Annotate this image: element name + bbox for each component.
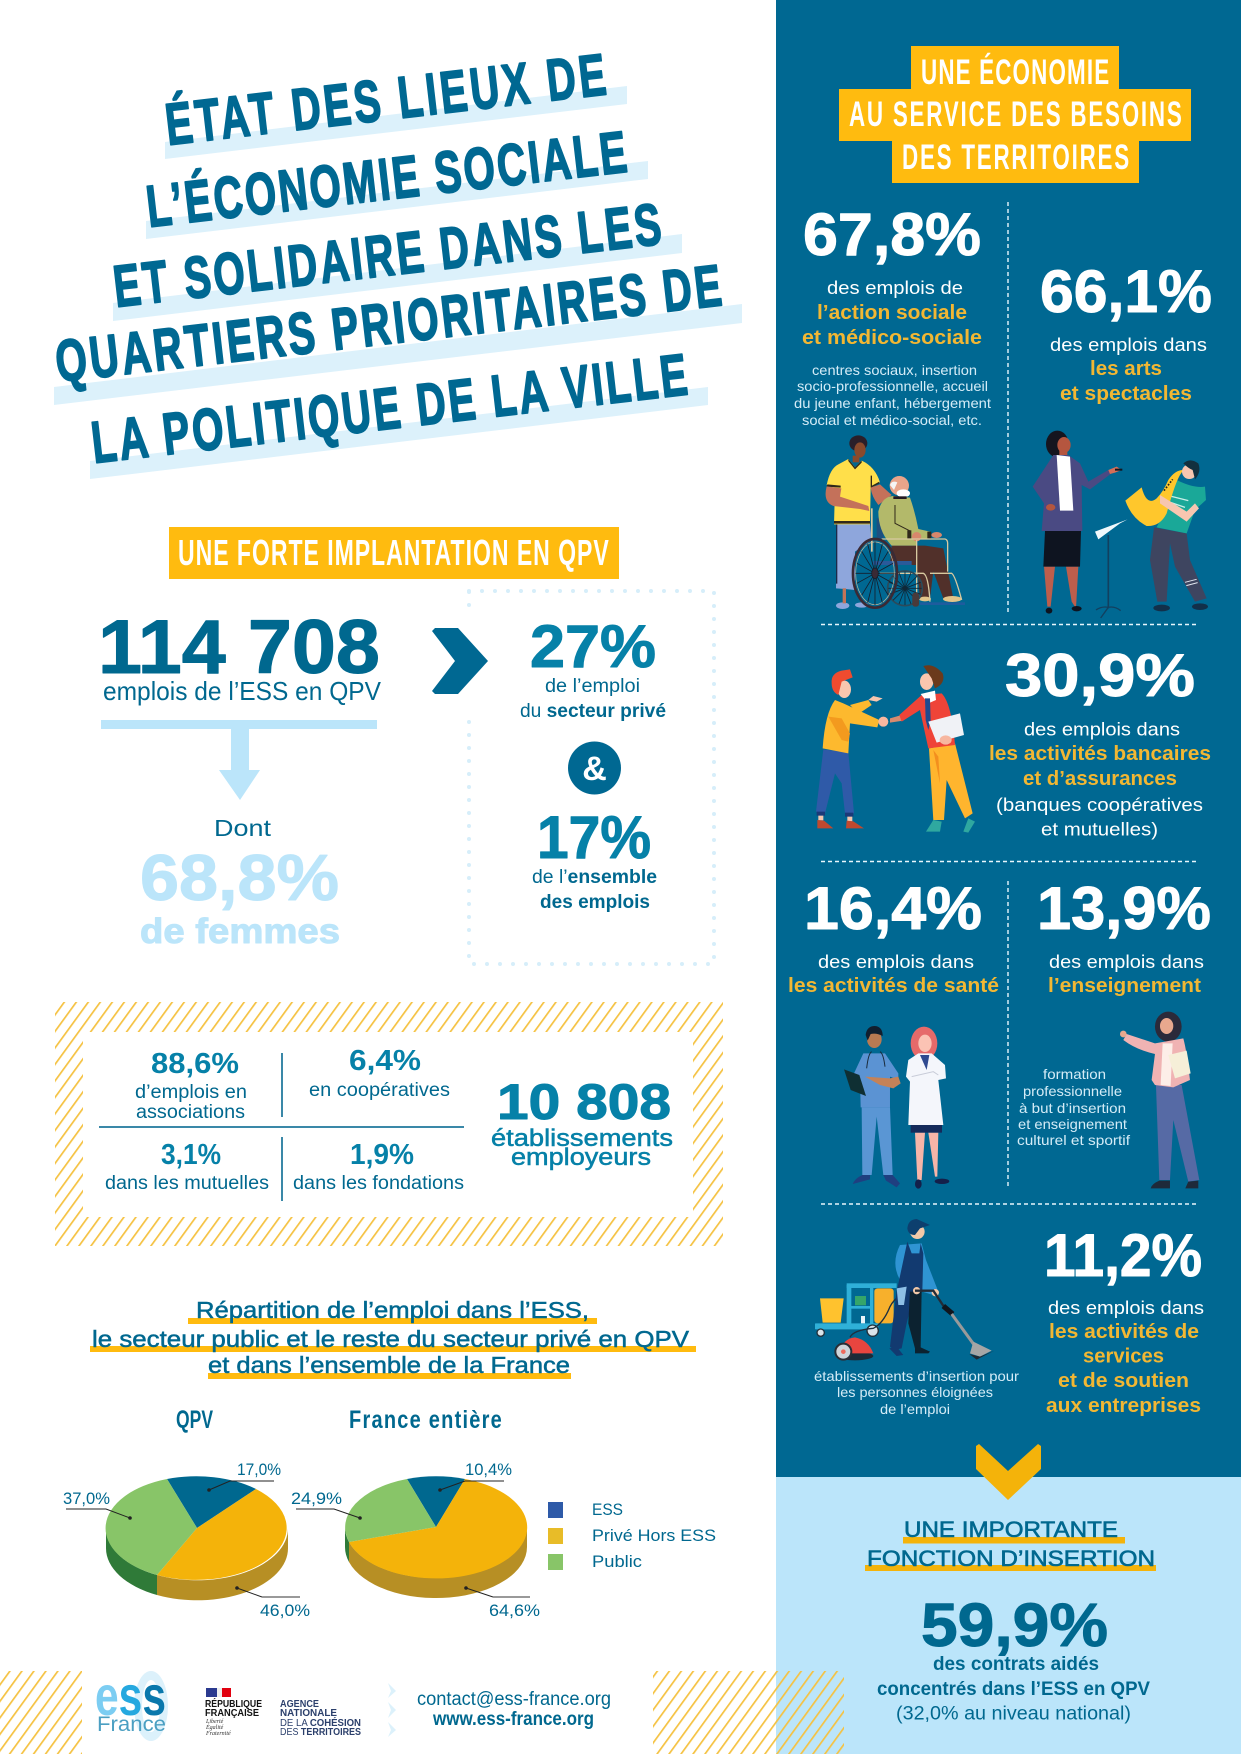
logo: République française: Égalité (205, 1723, 224, 1731)
stat: 30,9% activités bancaires: des emplois dans (1024, 718, 1180, 740)
stat: 67,8% action sociale: centres sociaux, insertion (812, 362, 977, 378)
stat: 68,8% de femmes: Dont (214, 815, 272, 841)
logo: Agence nationale de la cohésion des territoires: NATIONALE (280, 1708, 337, 1719)
stat: 6,4% coopératives: 6,4% (349, 1045, 421, 1077)
stat: 10 808 établissements: employeurs (511, 1144, 651, 1171)
chart: France entière pie: 24,9% (291, 1489, 342, 1508)
stat: 10 808 établissements: 10 808 (497, 1074, 671, 1130)
chart: France entière pie: 10,4% (465, 1460, 512, 1479)
stat: 17% de l'ensemble des emplois: des emplois (540, 892, 650, 913)
arrow: yellow chevron down (976, 1444, 1041, 1500)
stat: 68,8% de femmes: 68,8% (140, 841, 339, 914)
logo: Agence nationale de la cohésion des territoires: DES TERRITOIRES (280, 1727, 361, 1738)
text: formation professionnelle: à but d’insertion (1019, 1100, 1126, 1116)
stat: 16,4% activités de santé: les activités de santé (788, 974, 999, 997)
stat: 67,8% action sociale: social et médico-social, etc. (802, 412, 982, 428)
stat: 3,1% mutuelles: dans les mutuelles (105, 1173, 269, 1194)
heading: une économie au service des besoins (839, 46, 1191, 183)
legend (548, 1500, 716, 1571)
dashed vertical separators (821, 202, 1196, 1204)
stat: 30,9% activités bancaires: et d’assurances (1023, 767, 1177, 790)
chart: France entière pie: 64,6% (489, 1601, 540, 1620)
stat: 1,9% fondations: dans les fondations (293, 1173, 464, 1194)
contact block (417, 1689, 611, 1730)
icon: ampersand badge: & (582, 750, 607, 788)
heading: répartition de l'emploi (90, 1297, 696, 1379)
stat: 88,6% associations (135, 1048, 247, 1123)
stat: 67,8% action sociale: 67,8% (803, 201, 981, 268)
stat: 88,6% associations: 88,6% (151, 1048, 239, 1080)
stat: 88,6% associations: associations (136, 1102, 245, 1123)
chart: QPV pie: 37,0% (63, 1489, 110, 1508)
logo: République française: RÉPUBLIQUE (205, 1697, 262, 1710)
legend: Public (592, 1552, 643, 1571)
stat: 88,6% associations: d’emplois en (135, 1082, 247, 1103)
illustration: cleaner with cart and vacuum (815, 1219, 994, 1360)
illustration: doctors and teacher (844, 1012, 1199, 1189)
contact block: www.ess-france.org (432, 1709, 594, 1730)
logo: Agence nationale de la cohésion des territoires: AGENCE (280, 1699, 319, 1710)
stat: 17% de l'ensemble des emplois (532, 804, 657, 913)
stat: 11,2% services et soutien: les activités de (1049, 1320, 1199, 1343)
text: formation professionnelle: professionnelle (1023, 1083, 1122, 1099)
stat: 11,2% services et soutien (1044, 1222, 1204, 1417)
stat: 11,2% services et soutien: et de soutien (1058, 1369, 1189, 1392)
stat: 67,8% action sociale: et médico-sociale (802, 326, 982, 349)
arrow: dark chevron (432, 628, 488, 694)
heading: une importante fonction d'insertion: UNE IMPORTANTE (904, 1517, 1118, 1542)
chart: QPV pie: 17,0% (237, 1460, 281, 1479)
logo: République française: Fraternité (205, 1731, 231, 1737)
stat: 16,4% activités de santé: 16,4% (804, 875, 982, 942)
logo: Agence nationale de la cohésion des territoires (280, 1699, 361, 1738)
stat: 67,8% action sociale: l’action sociale (817, 301, 967, 324)
stat: 10 808 établissements (491, 1074, 673, 1171)
stat: 27% du secteur privé: 27% (530, 613, 656, 680)
stat: 66,1% arts et spectacles: et spectacles (1060, 382, 1192, 405)
heading: une économie au service des besoins: UNE ÉCONOMIE (921, 52, 1109, 92)
stat: 17% de l'ensemble des emplois: de l’ensemble (532, 867, 657, 888)
stat: 13,9% enseignement: 13,9% (1037, 875, 1211, 942)
stat: 6,4% coopératives (309, 1045, 450, 1101)
text: établissements d'insertion: les personnes éloignées (837, 1384, 993, 1400)
stat: 67,8% action sociale (794, 201, 991, 428)
heading: répartition de l'emploi: et dans l’ensemble de la France (208, 1352, 570, 1378)
stat: 1,9% fondations: 1,9% (350, 1139, 414, 1171)
text: formation professionnelle (1017, 1066, 1130, 1148)
stat: 59,9% contrats aidés: des contrats aidés (933, 1654, 1099, 1675)
logo: République française (205, 1688, 262, 1737)
title: L’ÉCONOMIE SOCIALE (143, 118, 630, 240)
title: QUARTIERS PRIORITAIRES DE (52, 252, 725, 395)
stat: 10 808 établissements: établissements (491, 1125, 673, 1152)
stat: 6,4% coopératives: en coopératives (309, 1080, 450, 1101)
stat: 1,9% fondations (293, 1139, 464, 1194)
text: formation professionnelle: culturel et sportif (1017, 1132, 1130, 1148)
stat: 59,9% contrats aidés: (32,0% au niveau national) (896, 1704, 1131, 1724)
stat: 114 708 emplois: emplois de l’ESS en QPV (103, 676, 382, 706)
stat: 30,9% activités bancaires: 30,9% (1005, 642, 1195, 709)
stat: 17% de l'ensemble des emplois: 17% (537, 804, 651, 871)
stat: 68,8% de femmes (140, 815, 340, 951)
icon: ampersand badge (568, 742, 621, 794)
text: établissements d'insertion: de l’emploi (880, 1401, 950, 1417)
chart title: QPV: QPV (176, 1405, 214, 1434)
panel: right dark column (776, 0, 1241, 1477)
stat: 30,9% activités bancaires: les activités bancaires (989, 742, 1211, 765)
stat: 27% du secteur privé (520, 613, 666, 722)
heading: répartition de l'emploi: le secteur public et le reste du secteur privé en QPV (92, 1326, 690, 1352)
stat: 67,8% action sociale: des emplois de (827, 277, 963, 298)
stat: 3,1% mutuelles (105, 1139, 269, 1194)
chart: QPV pie (63, 1460, 310, 1620)
chart: France entière pie (291, 1460, 540, 1620)
stat: 13,9% enseignement: des emplois dans (1049, 951, 1204, 972)
stat: 67,8% action sociale: du jeune enfant, hébergement (794, 395, 991, 411)
stat: 66,1% arts et spectacles: les arts (1090, 357, 1162, 380)
title: ET SOLIDAIRE DANS LES (110, 190, 665, 320)
text: formation professionnelle: et enseignement (1018, 1116, 1127, 1132)
title (52, 41, 742, 479)
stat: 67,8% action sociale: socio-professionnelle, accueil (797, 378, 988, 394)
icon: light chevrons (388, 1683, 396, 1737)
chart: QPV pie: 46,0% (260, 1601, 310, 1620)
stat: 3,1% mutuelles: 3,1% (161, 1139, 221, 1171)
chart title: France entière: France entière (349, 1406, 502, 1434)
panel: dotted box (462, 591, 714, 964)
stat: 27% du secteur privé: du secteur privé (520, 701, 666, 722)
stat: 11,2% services et soutien: des emplois dans (1048, 1297, 1204, 1318)
stat: 68,8% de femmes: de femmes (140, 912, 340, 951)
text: formation professionnelle: formation (1043, 1066, 1106, 1082)
heading: une économie au service des besoins: AU SERVICE DES BESOINS (849, 95, 1182, 134)
stat: 59,9% contrats aidés (877, 1591, 1150, 1724)
illustration: conductor and saxophonist (1033, 431, 1208, 618)
logo: ESS France: ess (95, 1664, 166, 1727)
heading: une importante fonction d'insertion: FONCTION D’INSERTION (867, 1546, 1155, 1571)
stat: 13,9% enseignement: l’enseignement (1048, 974, 1201, 997)
arrow: bar and down arrow (101, 720, 377, 800)
illustration: caregiver and wheelchair (826, 435, 965, 609)
logo: République française: FRANÇAISE (205, 1708, 259, 1719)
illustration: handshake (816, 665, 975, 833)
contact block: contact@ess-france.org (417, 1689, 611, 1710)
stat: 59,9% contrats aidés: concentrés dans l’ESS en QPV (877, 1679, 1150, 1700)
logo: Agence nationale de la cohésion des territoires: DE LA COHÉSION (280, 1716, 361, 1729)
panel: insertion light-blue block (776, 1477, 1241, 1754)
stat: 11,2% services et soutien: aux entreprises (1046, 1394, 1201, 1417)
stat: 11,2% services et soutien: services (1083, 1344, 1164, 1368)
stat: 114 708 emplois: 114 708 (98, 605, 380, 690)
heading: une importante fonction d'insertion (865, 1517, 1156, 1571)
stat: 11,2% services et soutien: 11,2% (1044, 1222, 1202, 1289)
stat: 30,9% activités bancaires: et mutuelles) (1041, 818, 1158, 840)
stat: 16,4% activités de santé: des emplois dans (818, 951, 974, 972)
legend: Privé Hors ESS (592, 1526, 716, 1545)
footer hatch right (653, 1671, 844, 1754)
stat: 30,9% activités bancaires (989, 642, 1211, 840)
stat: 30,9% activités bancaires: (banques coopératives (996, 794, 1203, 815)
legend: ESS (592, 1500, 623, 1519)
logo: République française: Liberté (205, 1719, 224, 1725)
title: ÉTAT DES LIEUX DE (162, 41, 609, 158)
panel: hatched stats box (55, 1002, 723, 1246)
footer hatch left (0, 1671, 82, 1754)
stat: 66,1% arts et spectacles: des emplois dans (1050, 334, 1207, 355)
stat: 27% du secteur privé: de l’emploi (545, 676, 640, 697)
stat: 66,1% arts et spectacles (1040, 258, 1212, 405)
logo: ESS France: France (97, 1713, 166, 1736)
heading: une économie au service des besoins: DES TERRITOIRES (902, 138, 1129, 177)
stat: 59,9% contrats aidés: 59,9% (921, 1591, 1108, 1659)
heading: une forte implantation: UNE FORTE IMPLANTATION EN QPV (178, 534, 609, 573)
text: établissements d'insertion (814, 1368, 1019, 1417)
title: LA POLITIQUE DE LA VILLE (88, 341, 691, 476)
stat: 16,4% activités de santé (788, 875, 999, 997)
stat: 13,9% enseignement (1037, 875, 1211, 997)
heading: répartition de l'emploi: Répartition de l’emploi dans l’ESS, (196, 1297, 589, 1323)
stat: 66,1% arts et spectacles: 66,1% (1040, 258, 1212, 325)
text: établissements d'insertion: établissements d’insertion pour (814, 1368, 1019, 1384)
